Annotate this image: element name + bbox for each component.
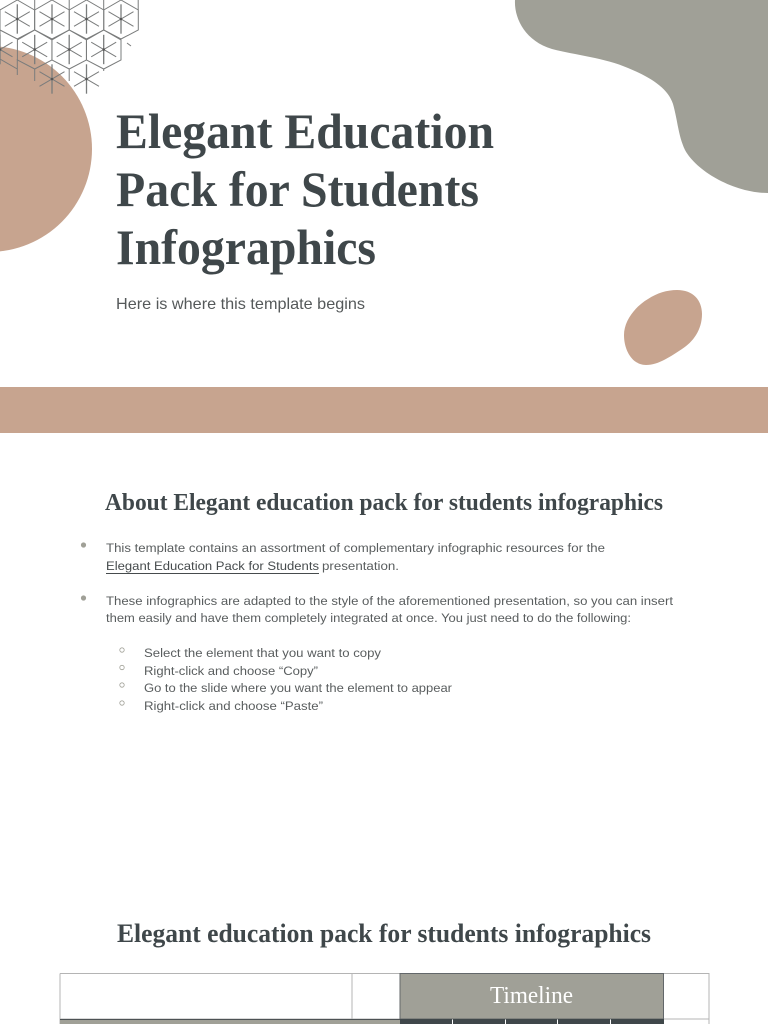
table cell: timeline header: Timeline (490, 983, 573, 1009)
blob: grey top right (515, 0, 768, 193)
bullet: adaptation description: These infographics are adapted to the style of the aforementioned presentation, so you can insert (106, 594, 674, 608)
bullet list (81, 541, 674, 713)
bullet: adaptation description: them easily and have them completely integrated at once. You just need to do the following: (106, 611, 631, 625)
sub-list: steps: Right-click and choose “Copy” (144, 664, 318, 678)
bullet: adaptation description (81, 594, 674, 625)
bullet: template description (81, 541, 605, 574)
title: Infographics (116, 219, 376, 275)
sub-list: steps: Right-click and choose “Paste” (144, 699, 323, 713)
subtitle: Here is where this template begins (116, 296, 365, 313)
sub-list: steps: Go to the slide where you want the element to appear (144, 681, 452, 695)
decorative circle: tan left (0, 46, 92, 252)
title: Pack for Students (116, 161, 479, 217)
blob: tan small (624, 290, 702, 365)
sub-list: steps: Select the element that you want to copy (144, 646, 382, 660)
table: timeline (60, 974, 709, 1024)
table cell: timeline header (400, 974, 664, 1019)
table cell: grey label (60, 1020, 400, 1024)
heading: about: About Elegant education pack for students infographics (105, 489, 663, 516)
table row: dark week cells (400, 1019, 664, 1024)
title: Elegant Education (116, 103, 494, 159)
sub-list: steps (120, 646, 452, 713)
table grid lines (60, 974, 709, 1024)
hexagon line pattern (0, 0, 138, 94)
title (116, 103, 494, 275)
bullet: template description: presentation. (322, 559, 399, 573)
bullet: template description: This template contains an assortment of complementary infographic resources for the (106, 541, 605, 555)
bullet: template description: Elegant Education Pack for Students (106, 559, 319, 573)
tan divider band (0, 387, 768, 433)
heading: infographics: Elegant education pack for students infographics (117, 918, 651, 948)
